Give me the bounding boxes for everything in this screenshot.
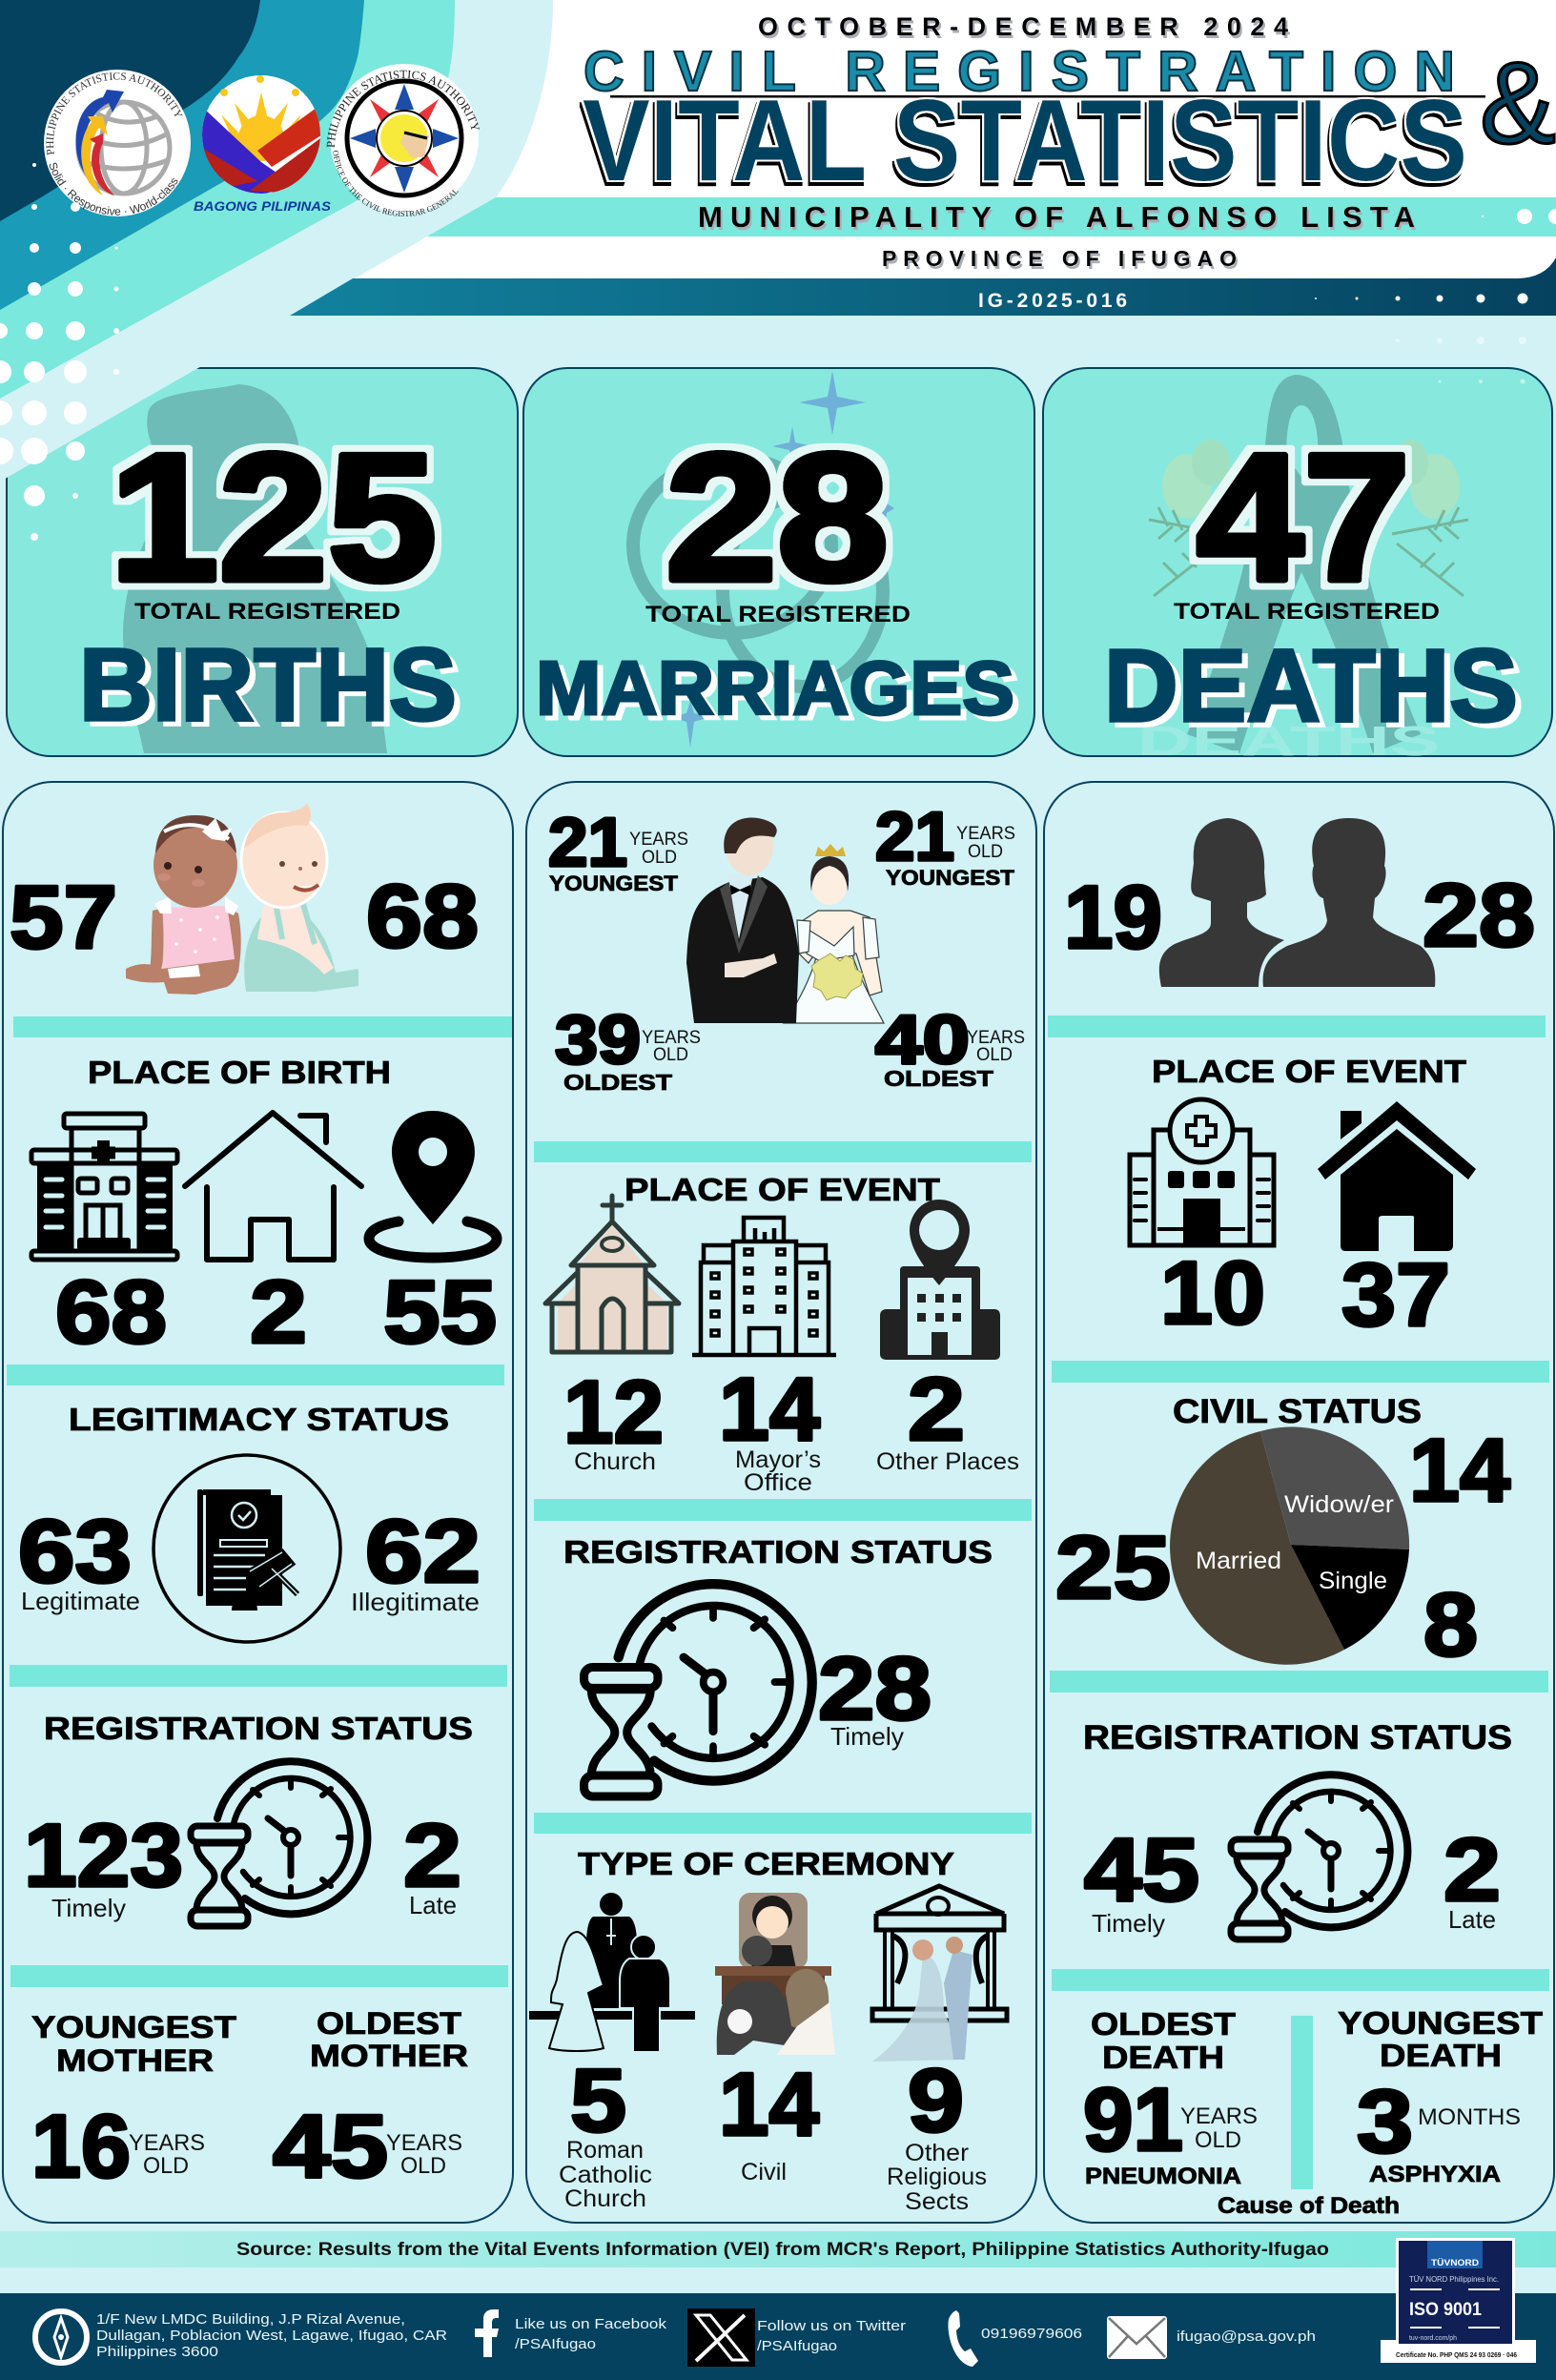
label: Illegitimate: [351, 1588, 480, 1616]
stat: total births: [79, 417, 457, 742]
cause: ASPHYXIA: [1369, 2162, 1501, 2187]
timely marriages: 28: [818, 1638, 932, 1738]
unit line 2: OLD: [143, 2153, 189, 2179]
unit line 2: OLD: [642, 848, 677, 868]
twitter text: [757, 2318, 906, 2354]
cause of death caption: Cause of Death: [1218, 2193, 1400, 2219]
unit line 2: OLD: [1195, 2127, 1241, 2153]
icon: clock and hourglass: [191, 1761, 367, 1926]
address: [96, 2311, 447, 2360]
label: Timely: [830, 1722, 904, 1751]
header band: province: [358, 236, 1556, 278]
wedding rings watermark: [633, 458, 883, 687]
unit: YEARS: [629, 830, 688, 850]
label: Legitimate: [21, 1587, 140, 1615]
marriages label: MARRIAGES: [536, 646, 1014, 730]
other sects weddings: [887, 2050, 987, 2215]
oldest bride: [875, 1002, 1025, 1091]
hospital births: 68: [55, 1262, 167, 1362]
caption: TOTAL REGISTERED: [645, 602, 911, 627]
church weddings: 12: [563, 1362, 664, 1462]
icon: X: [687, 2308, 755, 2367]
company: TÜV NORD Philippines Inc.: [1409, 2275, 1499, 2284]
unit: YEARS: [386, 2130, 462, 2156]
illustration: two babies: [126, 803, 358, 995]
logo: Philippine Statistics Authority: [44, 70, 191, 216]
age: 91: [1083, 2069, 1183, 2169]
logo: Office of the Civil Registrar General: [326, 64, 480, 216]
other places weddings: [876, 1359, 1019, 1475]
ISO text: ISO 9001: [1409, 2300, 1482, 2320]
slice label single: Single: [1319, 1568, 1387, 1594]
heading: civil status: CIVIL STATUS: [1173, 1393, 1422, 1430]
hospital deaths: 10: [1160, 1242, 1265, 1343]
icon: house outline: [185, 1113, 361, 1260]
decorative dots right: [1315, 209, 1556, 383]
icon: male and female silhouettes: [1159, 818, 1435, 987]
late births: 2: [403, 1805, 461, 1905]
age: 16: [31, 2096, 131, 2196]
deaths label: DEATHS: [1104, 627, 1518, 743]
logo: Bagong Pilipinas: [194, 75, 332, 214]
slice label married: Married: [1196, 1548, 1281, 1574]
single deaths: 8: [1423, 1574, 1478, 1674]
oldest death: OLDEST: [1091, 2006, 1236, 2041]
number of boys: 68: [366, 866, 479, 966]
label: Other Places: [876, 1448, 1019, 1475]
legitimate births: 63: [18, 1501, 132, 1601]
heading: place of event deaths: PLACE OF EVENT: [1152, 1054, 1466, 1089]
label line 2: Religious: [887, 2164, 987, 2190]
timely births: 123: [24, 1805, 183, 1905]
icon: mail: [1107, 2316, 1167, 2359]
unit line 2: OLD: [400, 2153, 446, 2179]
panel: births detail background: [3, 782, 513, 2223]
handle: /PSAIfugao: [515, 2336, 596, 2352]
heading: place of birth: PLACE OF BIRTH: [88, 1055, 391, 1090]
female deaths: 19: [1064, 867, 1162, 967]
icon: clock and hourglass: [584, 1584, 812, 1796]
married deaths: 25: [1055, 1517, 1171, 1617]
label: Timely: [51, 1894, 126, 1922]
handle: /PSAIfugao: [757, 2338, 837, 2354]
icon: church: [545, 1196, 679, 1352]
illegitimate births: [351, 1501, 481, 1616]
slice label widowed: Widow/er: [1284, 1491, 1394, 1518]
stat: total deaths: 47: [1197, 417, 1410, 619]
panel: total births: [7, 368, 518, 756]
label: YOUNGEST: [886, 866, 1015, 890]
heading: place of event: PLACE OF EVENT: [624, 1172, 940, 1207]
home births: 2: [250, 1262, 307, 1362]
oldest groom: 39: [555, 1002, 641, 1078]
label: Church: [574, 1448, 656, 1475]
home deaths: 37: [1341, 1244, 1450, 1344]
label line 3: Church: [564, 2185, 646, 2212]
heading: ampersand: &: [1480, 38, 1556, 168]
oldest mother: OLDEST: [317, 2006, 462, 2041]
youngest mother: [31, 2010, 237, 2196]
line 2: DEATH: [1380, 2038, 1502, 2073]
icon: municipal building: [692, 1218, 836, 1355]
other places weddings: 2: [908, 1359, 965, 1459]
TUV logo text: TÜVNORD: [1431, 2258, 1480, 2267]
caption: TOTAL REGISTERED: [134, 599, 400, 625]
icon: facebook: [475, 2309, 499, 2357]
icon: house solid: [1318, 1101, 1476, 1251]
illustration: bride and groom: [686, 817, 884, 1023]
label: OLDEST: [884, 1066, 993, 1091]
heading: registration status marriages: REGISTRATION STATUS: [563, 1534, 993, 1570]
youngest death: [1338, 2005, 1543, 2187]
label line 3: Sects: [905, 2188, 969, 2215]
unit: YEARS: [129, 2130, 205, 2156]
caption: TOTAL REGISTERED: [1174, 599, 1440, 625]
label: Timely: [1092, 1909, 1165, 1938]
mayor's office weddings: 14: [719, 1359, 820, 1459]
number of girls: 57: [10, 867, 117, 967]
icon: legal document in circle: [154, 1455, 340, 1642]
oldest groom: [555, 1002, 701, 1095]
stat: total marriages: [536, 417, 1014, 730]
facebook text: Like us on Facebook: [515, 2316, 667, 2332]
births label: BIRTHS: [79, 626, 457, 742]
catholic weddings: [559, 2050, 652, 2212]
header band: reference number: [290, 257, 1556, 316]
label line 2: Office: [744, 1469, 812, 1496]
age: 3: [1357, 2071, 1413, 2171]
timely deaths: 45: [1084, 1819, 1199, 1919]
header swoosh background: [0, 0, 1556, 482]
label: Roman: [566, 2137, 644, 2164]
logo: Office of the Civil Registrar General: OFFICE OF THE CIVIL REGISTRAR GENERAL: [333, 151, 459, 216]
label line 2: Catholic: [559, 2162, 652, 2188]
unit: YEARS: [956, 824, 1015, 844]
youngest bride: 21: [875, 799, 954, 875]
stat: total births: 125: [110, 417, 437, 619]
awareness ribbon watermark: [1187, 375, 1421, 753]
pie chart: civil status: [1170, 1426, 1409, 1665]
footer background: [0, 2293, 1556, 2380]
age: 45: [273, 2096, 388, 2196]
reference number: IG-2025-016: [978, 290, 1127, 312]
address line 2: Dullagan, Poblacion West, Lagawe, Ifugao, CAR: [96, 2328, 447, 2344]
icon: phone: [948, 2310, 978, 2367]
flowers and leaves: [1149, 440, 1468, 596]
civil weddings: 14: [719, 2054, 819, 2154]
icon: hospital: [31, 1114, 177, 1260]
oldest death: [1083, 2006, 1258, 2189]
widowed deaths: 14: [1409, 1420, 1510, 1520]
logo: Philippine Statistics Authority: PHILIPPINE STATISTICS AUTHORITY: [46, 72, 183, 155]
stat: total deaths: [1104, 417, 1518, 743]
unit line 2: OLD: [968, 842, 1003, 862]
certificate: Certificate No. PHP QMS 24 93 0269 · 046: [1396, 2352, 1517, 2359]
panel: marriages detail background: [526, 782, 1036, 2223]
illustration: other religious ceremony: [872, 1886, 1007, 2062]
heading: municipality: MUNICIPALITY OF ALFONSO LISTA: [698, 200, 1415, 234]
icon: other places pin and building: [880, 1200, 1000, 1360]
youngest groom: 21: [548, 805, 627, 881]
unit: MONTHS: [1418, 2104, 1521, 2130]
male deaths: 28: [1423, 865, 1535, 965]
label: Late: [409, 1891, 457, 1919]
panel: total marriages: [523, 368, 1034, 756]
late deaths: 2: [1443, 1819, 1501, 1919]
unit line 2: OLD: [653, 1045, 688, 1065]
panel: deaths detail background: [1044, 782, 1554, 2223]
twitter text: Follow us on Twitter: [757, 2318, 906, 2334]
heading rule: [610, 95, 1485, 97]
ISO badge: [1381, 2238, 1536, 2363]
line 2: DEATH: [1102, 2040, 1224, 2075]
stat: total marriages: 28: [665, 417, 889, 619]
star marks: [220, 75, 299, 96]
icon: hospital with cross: [1128, 1099, 1276, 1246]
logo: Philippine Statistics Authority: Solid · Responsive · World-class: [50, 162, 177, 215]
label: Civil: [741, 2159, 787, 2185]
icon: church ceremony figures: [529, 1893, 695, 2052]
catholic weddings: 5: [570, 2050, 626, 2150]
heading: civil registration: CIVIL REGISTRATION: [584, 40, 1455, 103]
label: YOUNGEST: [549, 872, 679, 895]
label: Other: [905, 2140, 969, 2166]
cause: PNEUMONIA: [1085, 2164, 1241, 2189]
Bagong Pilipinas caption: BAGONG PILIPINAS: [194, 198, 332, 214]
illegitimate births: 62: [365, 1501, 481, 1601]
email: ifugao@psa.gov.ph: [1177, 2329, 1316, 2345]
youngest death: YOUNGEST: [1338, 2005, 1543, 2041]
line 2: MOTHER: [310, 2039, 468, 2073]
address: 1/F New LMDC Building, J.P Rizal Avenue,: [96, 2311, 405, 2328]
sparkle stars: [671, 371, 894, 748]
label: Late: [1448, 1905, 1496, 1934]
logo: Office of the Civil Registrar General: PHILIPPINE STATISTICS AUTHORITY: [326, 71, 480, 148]
unit: YEARS: [1180, 2103, 1258, 2129]
address line 3: Philippines 3600: [96, 2344, 218, 2360]
youngest mother: YOUNGEST: [31, 2010, 237, 2044]
heading: province: PROVINCE OF IFUGAO: [882, 246, 1237, 271]
header band: municipality: [427, 197, 1556, 236]
heading: registration status deaths: REGISTRATION STATUS: [1083, 1719, 1512, 1756]
website: tuv-nord.com/ph: [1409, 2335, 1457, 2342]
heading: legitimacy status: LEGITIMACY STATUS: [69, 1402, 449, 1437]
heading: period: OCTOBER-DECEMBER 2024: [758, 12, 1288, 41]
label: Mayor’s: [735, 1446, 821, 1473]
youngest groom: [548, 805, 688, 895]
icon: location pin: [369, 1111, 497, 1258]
oldest mother: [273, 2006, 468, 2196]
facebook text: [515, 2316, 667, 2352]
heading: type of ceremony: TYPE OF CEREMONY: [578, 1846, 954, 1881]
source text: Source: Results from the Vital Events Information (VEI) from MCR's Report, Philippine Statistics Authority-Ifugao: [236, 2240, 1329, 2260]
unit: YEARS: [967, 1028, 1025, 1048]
panel: total deaths: [1043, 368, 1552, 765]
youngest bride: [875, 799, 1015, 890]
line 2: MOTHER: [56, 2043, 214, 2078]
source band: [0, 2231, 1556, 2267]
other sects weddings: 9: [908, 2050, 964, 2150]
label: OLDEST: [563, 1070, 672, 1095]
heading: registration status births: REGISTRATION STATUS: [44, 1711, 473, 1746]
icon: compass: [35, 2311, 87, 2363]
unit line 2: OLD: [976, 1045, 1013, 1065]
unit: YEARS: [642, 1028, 701, 1048]
faint deaths watermark text: DEATHS: [1137, 718, 1440, 765]
phone number: 09196979606: [981, 2326, 1082, 2342]
oldest bride: 40: [875, 1002, 970, 1078]
decorative dots left: [0, 163, 119, 541]
icon: clock and hourglass: [1231, 1775, 1407, 1939]
other births: 55: [383, 1262, 497, 1362]
mother and child watermark: [123, 384, 387, 753]
illustration: civil ceremony: [715, 1893, 835, 2055]
